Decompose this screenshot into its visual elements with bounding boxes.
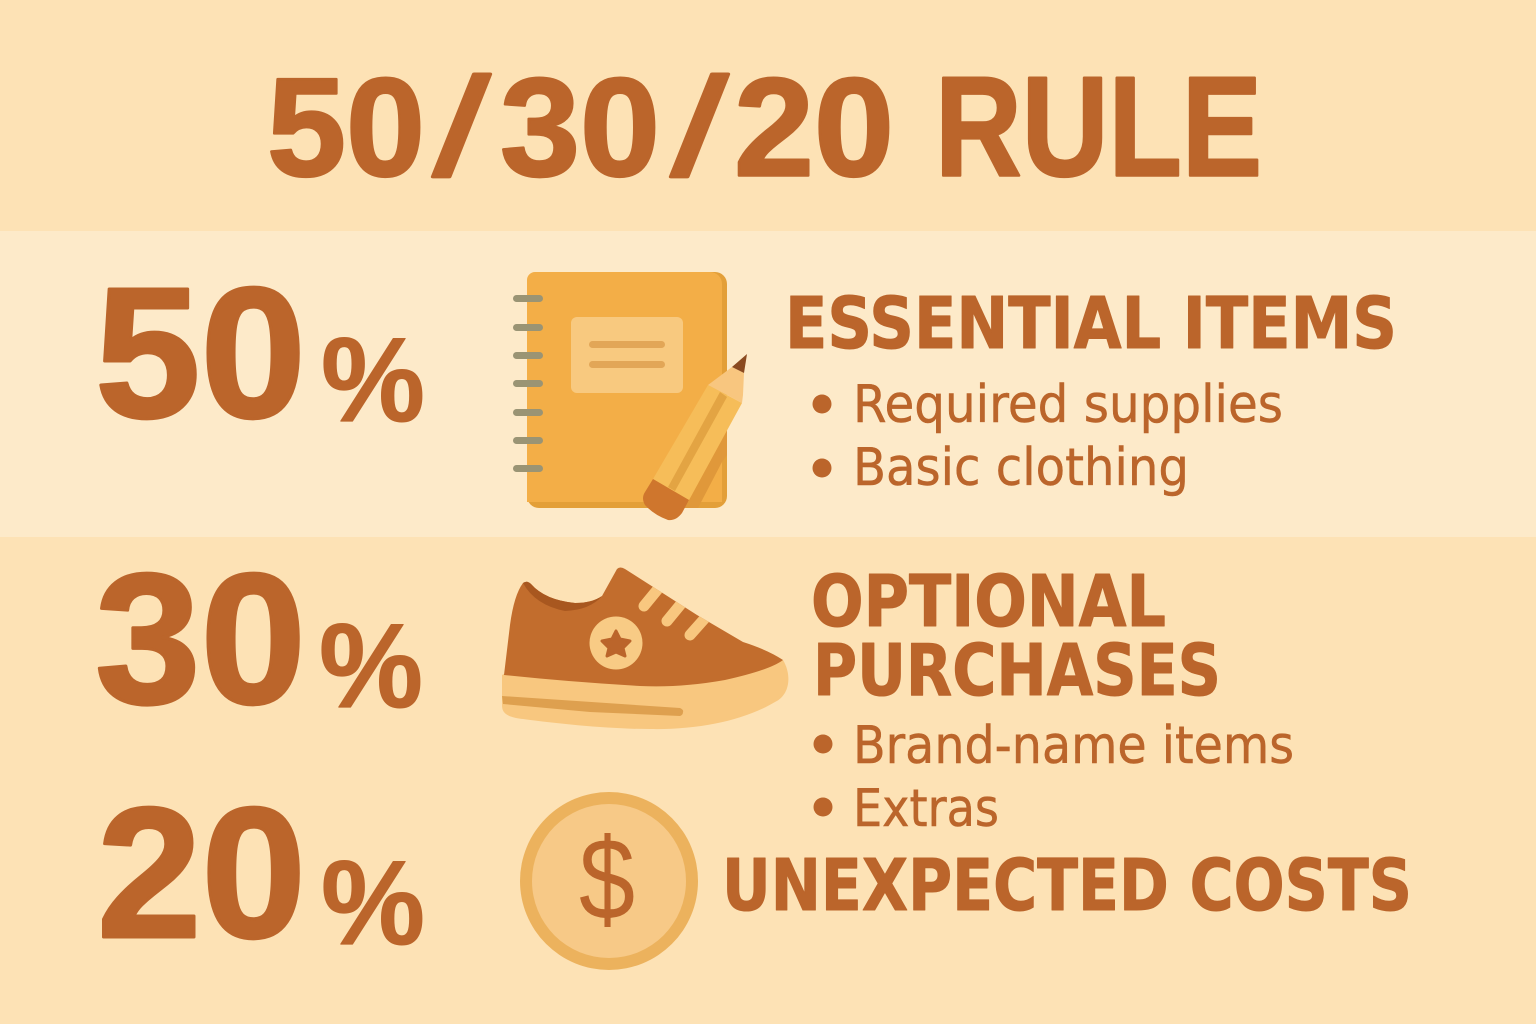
bullet list: essential items: Required supplies	[853, 375, 1283, 435]
bullet list: essential items: Basic clothing	[853, 438, 1189, 498]
panel: highlighted 50 percent band	[0, 231, 1536, 537]
number: 30: 30	[95, 536, 306, 743]
percent sign: %	[321, 836, 425, 970]
panel: 20 percent row	[97, 770, 1412, 977]
number: 20: 20	[97, 770, 306, 977]
panel: 30 percent row	[98, 568, 1292, 827]
panel: 50 percent row	[95, 250, 1397, 520]
number: 50: 50	[95, 250, 306, 457]
heading: optional purchases: OPTIONAL	[811, 560, 1166, 643]
title: 30	[500, 48, 660, 206]
title: 50	[267, 48, 425, 206]
icon: sneaker	[502, 568, 788, 729]
title	[267, 48, 1262, 206]
heading: unexpected costs: UNEXPECTED COSTS	[722, 844, 1412, 927]
title: RULE	[935, 48, 1262, 206]
percent sign: %	[319, 599, 423, 733]
icon: notebook and pencil	[513, 272, 747, 520]
percent sign: %	[321, 313, 425, 447]
title: 20	[734, 48, 894, 206]
title: /	[433, 48, 490, 206]
bullet list: optional purchases: Extras	[853, 779, 999, 839]
heading: essential items: ESSENTIAL ITEMS	[785, 282, 1397, 365]
heading: optional purchases: PURCHASES	[813, 629, 1221, 712]
heading: optional purchases	[811, 560, 1221, 712]
bullet list: optional purchases: Brand-name items	[853, 716, 1294, 776]
bullet list: essential items	[812, 375, 1283, 498]
icon: dollar coin: $	[579, 814, 635, 944]
title: /	[671, 48, 728, 206]
bullet list: optional purchases	[814, 716, 1294, 839]
icon: dollar coin	[520, 792, 698, 970]
